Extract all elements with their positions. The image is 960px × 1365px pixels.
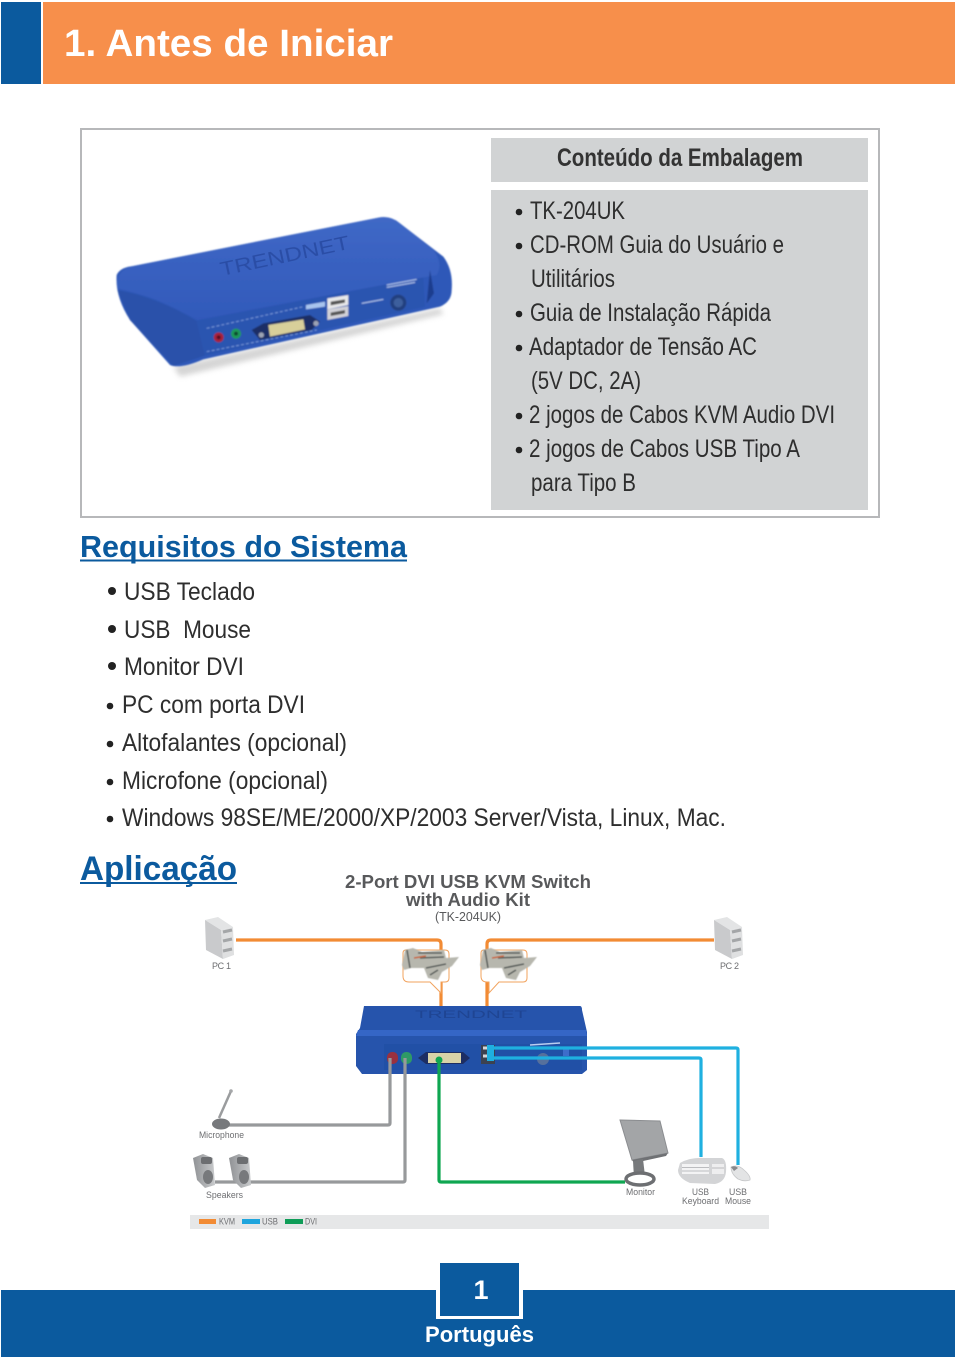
list: package contents: 2 jogos de Cabos USB Tipo A xyxy=(529,435,800,463)
legend: KVM xyxy=(219,1216,235,1226)
list: system requirements: Altofalantes (opcional) xyxy=(122,729,347,757)
icon: microphone xyxy=(199,1089,244,1140)
icon: monitor: Monitor xyxy=(626,1187,655,1197)
icon: PC 2 xyxy=(714,917,743,971)
cable: USB blue xyxy=(488,1046,738,1165)
heading: Conteúdo da Embalagem: Conteúdo da Embalagem xyxy=(557,144,803,172)
device: small KVM switch: TRENDNET xyxy=(415,1009,528,1021)
icon: keyboard: USB xyxy=(692,1187,709,1197)
icon: PC 1 xyxy=(205,917,234,971)
cable: audio gray xyxy=(215,1058,405,1182)
list: system requirements: USB Teclado xyxy=(124,578,255,606)
heading: Aplicação: Aplicação xyxy=(80,850,237,888)
language label: Português xyxy=(425,1322,534,1347)
icon: keyboard xyxy=(678,1158,726,1206)
list: package contents: (5V DC, 2A) xyxy=(531,367,641,395)
list: package contents: 2 jogos de Cabos KVM Audio DVI xyxy=(529,401,835,429)
header band xyxy=(1,2,955,84)
heading: Conteúdo da Embalagem xyxy=(491,138,868,182)
diagram: application xyxy=(190,872,769,1229)
list: package contents: CD-ROM Guia do Usuário e xyxy=(530,231,784,259)
legend xyxy=(190,1215,769,1229)
icon: speakers xyxy=(193,1154,251,1200)
icon: cable kit 1 xyxy=(402,948,459,993)
cable: KVM orange xyxy=(236,940,714,1006)
icon: PC 1: PC 1 xyxy=(212,961,231,971)
icon: speakers: Speakers xyxy=(206,1190,243,1200)
diagram title: with Audio Kit xyxy=(405,890,530,910)
icon: PC 2: PC 2 xyxy=(720,961,739,971)
legend: USB xyxy=(262,1216,278,1226)
list: system requirements xyxy=(107,578,726,832)
icon: keyboard: Keyboard xyxy=(682,1196,719,1206)
heading: Requisitos do Sistema: Requisitos do Sistema xyxy=(80,529,408,564)
footer band xyxy=(1,1263,955,1357)
list: system requirements: Monitor DVI xyxy=(124,653,244,681)
list: system requirements: USB Mouse xyxy=(124,616,251,644)
title: 1. Antes de Iniciar xyxy=(64,23,393,65)
diagram title: (TK-204UK) xyxy=(435,909,501,924)
icon: mouse xyxy=(725,1166,751,1206)
list: system requirements: Windows 98SE/ME/2000/XP/2003 Server/Vista, Linux, Mac. xyxy=(122,804,726,832)
device: small KVM switch xyxy=(356,1006,587,1074)
diagram title: 2-Port DVI USB KVM Switch xyxy=(345,872,591,892)
list: package contents: Guia de Instalação Rápida xyxy=(530,299,771,327)
icon: mouse: Mouse xyxy=(725,1196,751,1206)
panel: product and package contents xyxy=(81,129,879,517)
list: package contents: para Tipo B xyxy=(531,469,636,497)
icon: microphone: Microphone xyxy=(199,1130,244,1140)
list: system requirements: PC com porta DVI xyxy=(122,691,305,719)
list: system requirements: Microfone (opcional) xyxy=(122,767,328,795)
diagram title xyxy=(345,872,591,924)
list: package contents: Utilitários xyxy=(531,265,615,293)
list: package contents xyxy=(491,190,868,510)
icon: monitor xyxy=(620,1120,668,1197)
list: package contents: TK-204UK xyxy=(530,197,625,225)
icon: mouse: USB xyxy=(729,1187,747,1197)
legend: DVI xyxy=(305,1216,317,1226)
list: package contents: Adaptador de Tensão AC xyxy=(529,333,757,361)
icon: cable kit 2 xyxy=(480,948,537,993)
embossed logo: TRENDNET xyxy=(218,233,352,281)
page number tab: 1 xyxy=(473,1275,489,1305)
page number tab xyxy=(436,1263,523,1319)
cable: DVI green xyxy=(436,1056,625,1182)
product photo: KVM switch xyxy=(116,217,452,377)
